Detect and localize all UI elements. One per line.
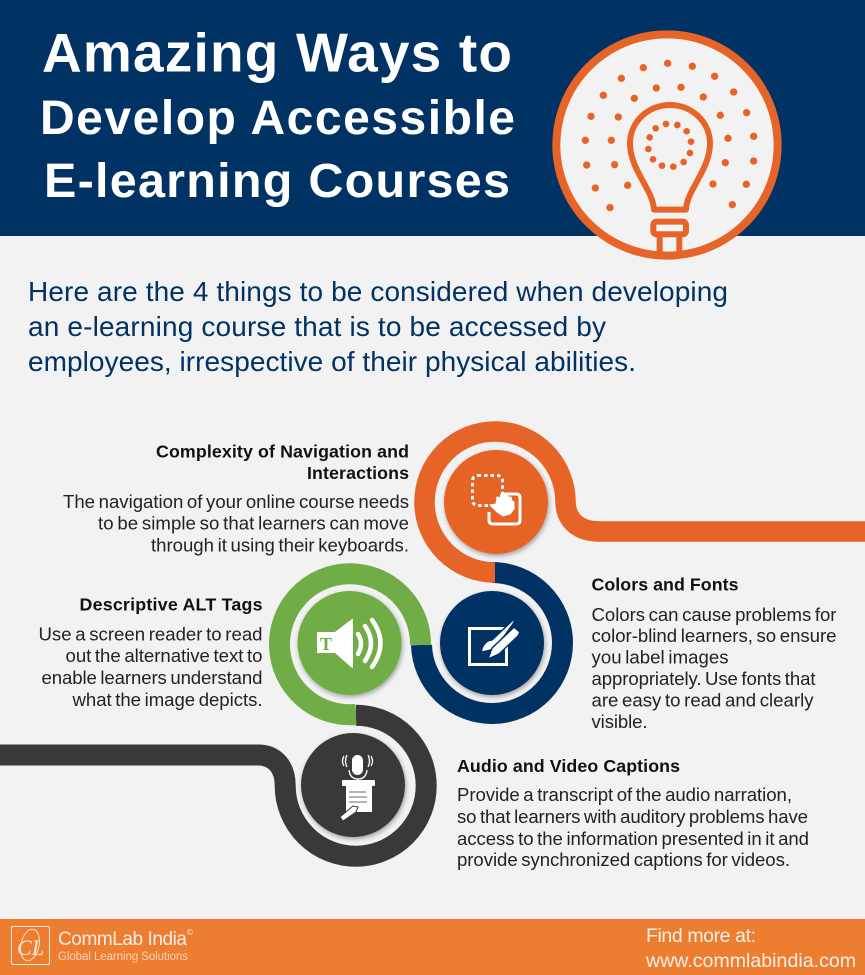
footer link text — [645, 925, 856, 972]
title: Amazing Ways to — [42, 22, 512, 84]
intro paragraph: an e-learning course that is to be accessed by — [28, 311, 606, 342]
text block: navigation: through it using their keyboards. — [151, 534, 409, 556]
text block: audio and video — [457, 756, 809, 870]
text block: audio and video: Provide a transcript of the audio narration, — [457, 784, 792, 805]
intro paragraph — [28, 276, 728, 377]
connector: dark ribbon — [0, 715, 426, 856]
text block: colors and fonts — [592, 574, 836, 732]
icon: edit pen and square — [470, 617, 520, 664]
disc: audio and video — [301, 733, 405, 837]
heading: navigation: Complexity of Navigation and — [156, 442, 409, 462]
footer band — [0, 919, 865, 975]
footer link text: Find more at: — [646, 925, 756, 947]
text block: colors and fonts: appropriately. Use fonts that — [592, 668, 816, 689]
logo: CommLab India — [12, 926, 193, 964]
title: Develop Accessible — [40, 92, 515, 145]
text block: ALT tags — [38, 594, 263, 710]
text block: ALT tags: Use a screen reader to read — [38, 624, 262, 644]
intro paragraph: employees, irrespective of their physical abilities. — [28, 346, 636, 377]
text block: audio and video: access to the information presented in it and — [457, 828, 809, 849]
text block: audio and video: provide synchronized captions for videos. — [457, 849, 790, 870]
text block: ALT tags: Descriptive ALT Tags — [80, 594, 263, 614]
connector: orange ribbon — [424, 432, 865, 572]
text block: colors and fonts: are easy to read and clearly — [592, 690, 814, 710]
connector: navy ribbon — [422, 572, 562, 714]
text block: navigation — [63, 442, 409, 556]
text block: colors and fonts: Colors can cause problems for — [592, 604, 836, 625]
text block: colors and fonts: color-blind learners, so ensure — [592, 625, 836, 646]
icon: speaker with T: T — [320, 634, 332, 654]
disc: navigation — [444, 450, 548, 554]
icon: touch and drag — [472, 476, 520, 524]
text block: colors and fonts: visible. — [592, 711, 648, 732]
footer link text: www.commlabindia.com — [645, 950, 856, 972]
text block: ALT tags: out the alternative text to — [66, 645, 262, 666]
title — [40, 22, 515, 208]
disc: colors and fonts — [440, 591, 544, 695]
text block: audio and video: Audio and Video Captions — [457, 756, 680, 776]
header band — [0, 0, 865, 236]
text block: colors and fonts: Colors and Fonts — [592, 574, 739, 594]
text block: ALT tags: what the image depicts. — [72, 689, 262, 710]
title: E-learning Courses — [44, 154, 510, 208]
text block: ALT tags: enable learners understand — [42, 667, 262, 688]
disc: ALT tags — [298, 591, 402, 695]
logo: CommLab India: Global Learning Solutions — [58, 951, 188, 963]
icon: light bulb in circle — [556, 34, 778, 256]
logo: CommLab India: CommLab India — [58, 929, 187, 950]
text block: navigation: The navigation of your online course needs — [63, 491, 409, 512]
text block: audio and video: so that learners with auditory problems have — [457, 806, 808, 827]
intro paragraph: Here are the 4 things to be considered when developing — [28, 276, 728, 307]
logo: CommLab India: CL — [17, 935, 44, 960]
heading: navigation: Interactions — [307, 463, 409, 483]
icon: podium with microphone — [340, 755, 375, 821]
heading: navigation — [156, 442, 409, 483]
connector: green ribbon — [280, 574, 421, 715]
text block: navigation: to be simple so that learners can move — [98, 512, 409, 534]
logo: CommLab India: © — [187, 928, 193, 937]
text block: colors and fonts: you label images — [592, 646, 728, 668]
